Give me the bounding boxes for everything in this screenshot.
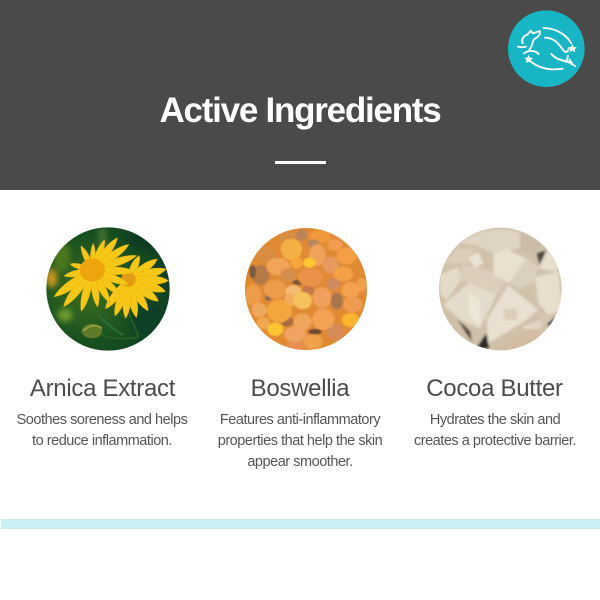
header band (0, 0, 600, 190)
arnica photo (46, 227, 170, 351)
ingredient: cocoa butter (414, 228, 576, 449)
cocoa butter description (414, 412, 576, 449)
icon: leaping bunny badge (508, 10, 585, 87)
cocoa butter heading: Cocoa Butter (426, 375, 563, 402)
title: Active Ingredients (160, 91, 440, 130)
footer accent bar (1, 519, 600, 529)
boswellia heading: Boswellia (251, 375, 349, 402)
cocoa butter photo (439, 228, 562, 350)
back flower (102, 254, 169, 319)
cocoa butter description: Hydrates the skin and (430, 412, 560, 428)
arnica heading: Arnica Extract (30, 375, 175, 402)
boswellia photo (245, 228, 367, 350)
ingredient: boswellia (218, 228, 382, 470)
arnica description (17, 412, 188, 449)
arnica description: Soothes soreness and helps (17, 412, 187, 428)
title underline (275, 161, 326, 164)
front flower (52, 235, 138, 312)
boswellia description: appear smoother. (247, 454, 353, 470)
boswellia description: properties that help the skin (218, 433, 382, 449)
boswellia description (218, 412, 382, 470)
boswellia description: Features anti-inflammatory (220, 412, 380, 428)
ingredient: arnica extract (17, 227, 188, 449)
arnica description: to reduce inflammation. (32, 433, 172, 449)
cocoa butter description: creates a protective barrier. (414, 433, 576, 449)
